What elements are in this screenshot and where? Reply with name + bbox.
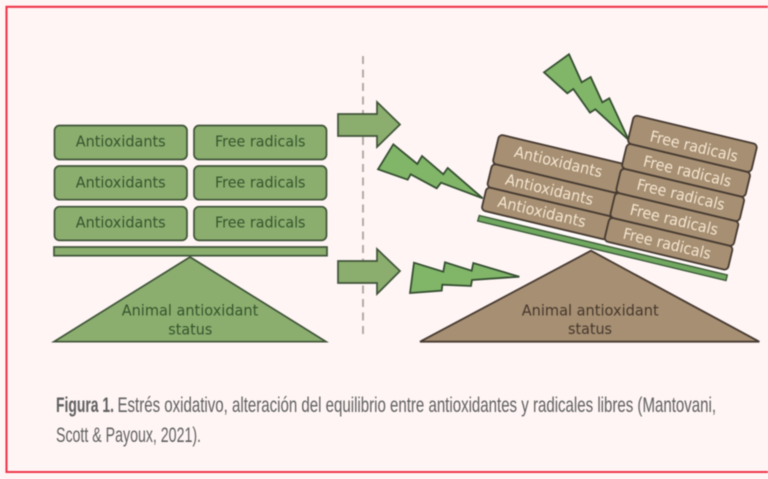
block: antioxidants row 2: Antioxidants xyxy=(76,173,166,191)
stack: antioxidants xyxy=(481,134,625,240)
caption: Figura 1. xyxy=(56,394,114,417)
block: antioxidants row 3 xyxy=(54,207,187,240)
block: free radicals 1: Free radicals xyxy=(648,127,740,166)
block: free radicals 3 xyxy=(616,168,745,222)
panel: tilted scale xyxy=(420,115,759,342)
block: free radicals row 3: Free radicals xyxy=(215,214,306,232)
block: free radicals 2 xyxy=(621,143,751,197)
lightning bolt: bottom xyxy=(410,262,519,293)
block: free radicals 3: Free radicals xyxy=(635,176,727,214)
stack: free radicals xyxy=(604,115,758,270)
block: free radicals 2: Free radicals xyxy=(641,152,733,191)
block: free radicals 4: Free radicals xyxy=(628,201,720,239)
tilted beam xyxy=(478,216,727,280)
block: free radicals 5: Free radicals xyxy=(621,225,713,263)
block: free radicals 1 xyxy=(627,115,758,173)
block: free radicals row 2: Free radicals xyxy=(215,173,306,191)
lightning bolt: middle xyxy=(378,144,483,198)
block: antioxidants 1 xyxy=(492,134,625,193)
arrow: lower xyxy=(338,249,400,294)
fulcrum triangle: status xyxy=(168,320,212,338)
fulcrum triangle xyxy=(54,257,326,342)
fulcrum triangle brown: status xyxy=(568,320,612,338)
block: antioxidants 1: Antioxidants xyxy=(512,143,604,181)
block: free radicals 5 xyxy=(604,217,733,270)
block: antioxidants 2 xyxy=(487,163,618,217)
caption xyxy=(56,394,716,447)
block: free radicals row 1: Free radicals xyxy=(215,133,306,151)
scale beam xyxy=(54,247,327,256)
block: free radicals row 3 xyxy=(194,207,326,240)
block: antioxidants row 1 xyxy=(54,126,187,160)
arrow: upper xyxy=(338,102,400,147)
fulcrum triangle brown: Animal antioxidant xyxy=(522,302,659,320)
block: antioxidants row 3: Antioxidants xyxy=(76,214,166,232)
block: free radicals row 2 xyxy=(194,166,326,200)
block: antioxidants 3: Antioxidants xyxy=(496,193,588,231)
caption: Scott & Payoux, 2021). xyxy=(56,424,201,447)
panel: balanced scale xyxy=(54,126,327,342)
block: free radicals row 1 xyxy=(194,126,326,160)
fulcrum triangle: Animal antioxidant xyxy=(122,302,258,320)
block: antioxidants row 1: Antioxidants xyxy=(76,133,166,151)
lightning bolt: top xyxy=(544,54,629,140)
beam highlight xyxy=(482,213,728,272)
dashed divider xyxy=(362,56,364,338)
block: antioxidants 3 xyxy=(481,187,612,240)
fulcrum triangle brown xyxy=(420,251,759,342)
block: antioxidants 2: Antioxidants xyxy=(504,171,595,209)
block: antioxidants row 2 xyxy=(54,166,187,200)
block: free radicals 4 xyxy=(610,192,739,247)
